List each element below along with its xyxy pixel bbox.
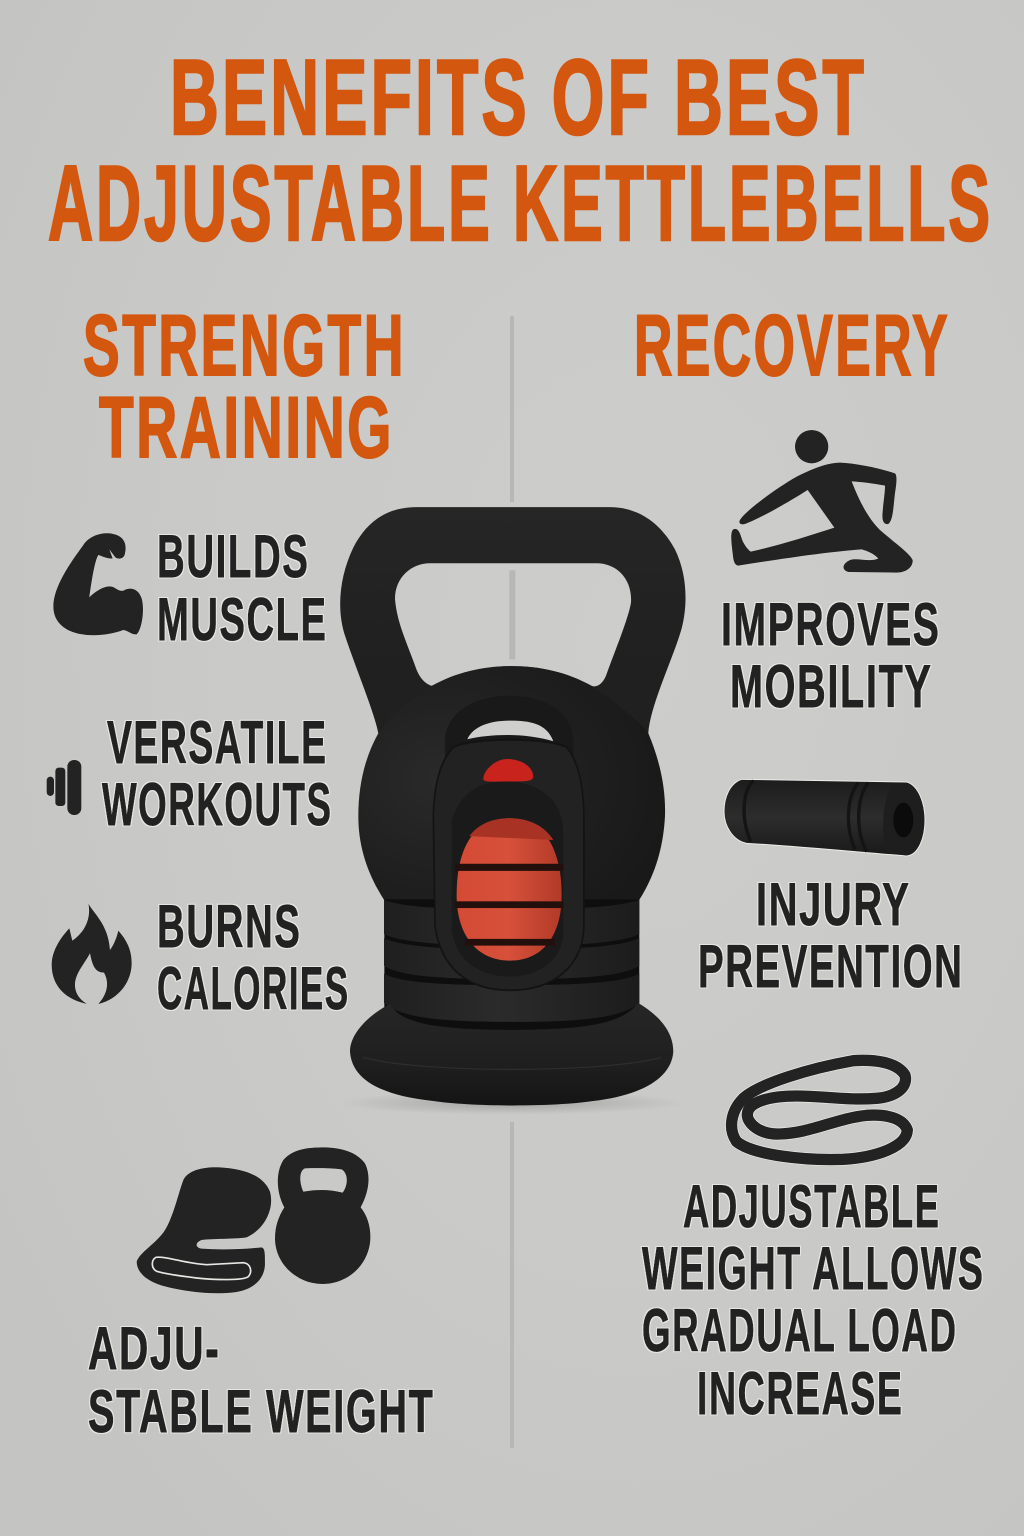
panel: recovery	[634, 298, 984, 1427]
heading: strength training: STRENGTH	[83, 298, 406, 394]
text: burns calories	[157, 893, 350, 1022]
icon: flame	[52, 903, 132, 1004]
icon: flexed arm	[53, 533, 143, 635]
heading: strength training: TRAINING	[99, 380, 394, 476]
text: builds muscle	[157, 523, 328, 653]
text: adjustable weight: ADJU-	[88, 1315, 220, 1382]
icon: dumbbell	[47, 760, 81, 815]
icon: hand and kettlebell	[137, 1147, 370, 1293]
text: adjustable weight: STABLE WEIGHT	[88, 1378, 434, 1445]
heading: strength training	[83, 298, 406, 476]
text: builds muscle: BUILDS	[157, 523, 310, 590]
kettlebell handle	[340, 507, 686, 753]
icon: stretching figure	[731, 430, 913, 573]
red weight selector	[455, 818, 563, 961]
text: versatile workouts: WORKOUTS	[102, 771, 332, 838]
text: improves mobility	[721, 591, 940, 720]
panel: strength training	[47, 298, 434, 1445]
text: adjustable weight allows gradual load increase: INCREASE	[697, 1360, 904, 1427]
text: burns calories: BURNS	[157, 893, 302, 960]
text: adjustable weight	[88, 1315, 434, 1445]
text: injury prevention: INJURY	[756, 871, 910, 938]
title	[48, 37, 993, 263]
weight plates	[384, 899, 639, 1034]
selector panel	[433, 740, 584, 990]
text: builds muscle: MUSCLE	[157, 586, 328, 653]
text: versatile workouts	[102, 709, 332, 838]
text: adjustable weight allows gradual load increase	[642, 1173, 984, 1427]
text: burns calories: CALORIES	[157, 955, 350, 1022]
icon: resistance band	[732, 1060, 907, 1160]
red button	[483, 759, 533, 782]
selector grip loop	[445, 696, 573, 761]
adjustable kettlebell product image	[340, 507, 687, 1115]
text: versatile workouts: VERSATILE	[107, 709, 328, 776]
text: injury prevention	[698, 871, 964, 1000]
kettlebell base	[350, 1003, 673, 1105]
icon: foam roller	[724, 779, 925, 856]
kettlebell body	[358, 666, 665, 901]
